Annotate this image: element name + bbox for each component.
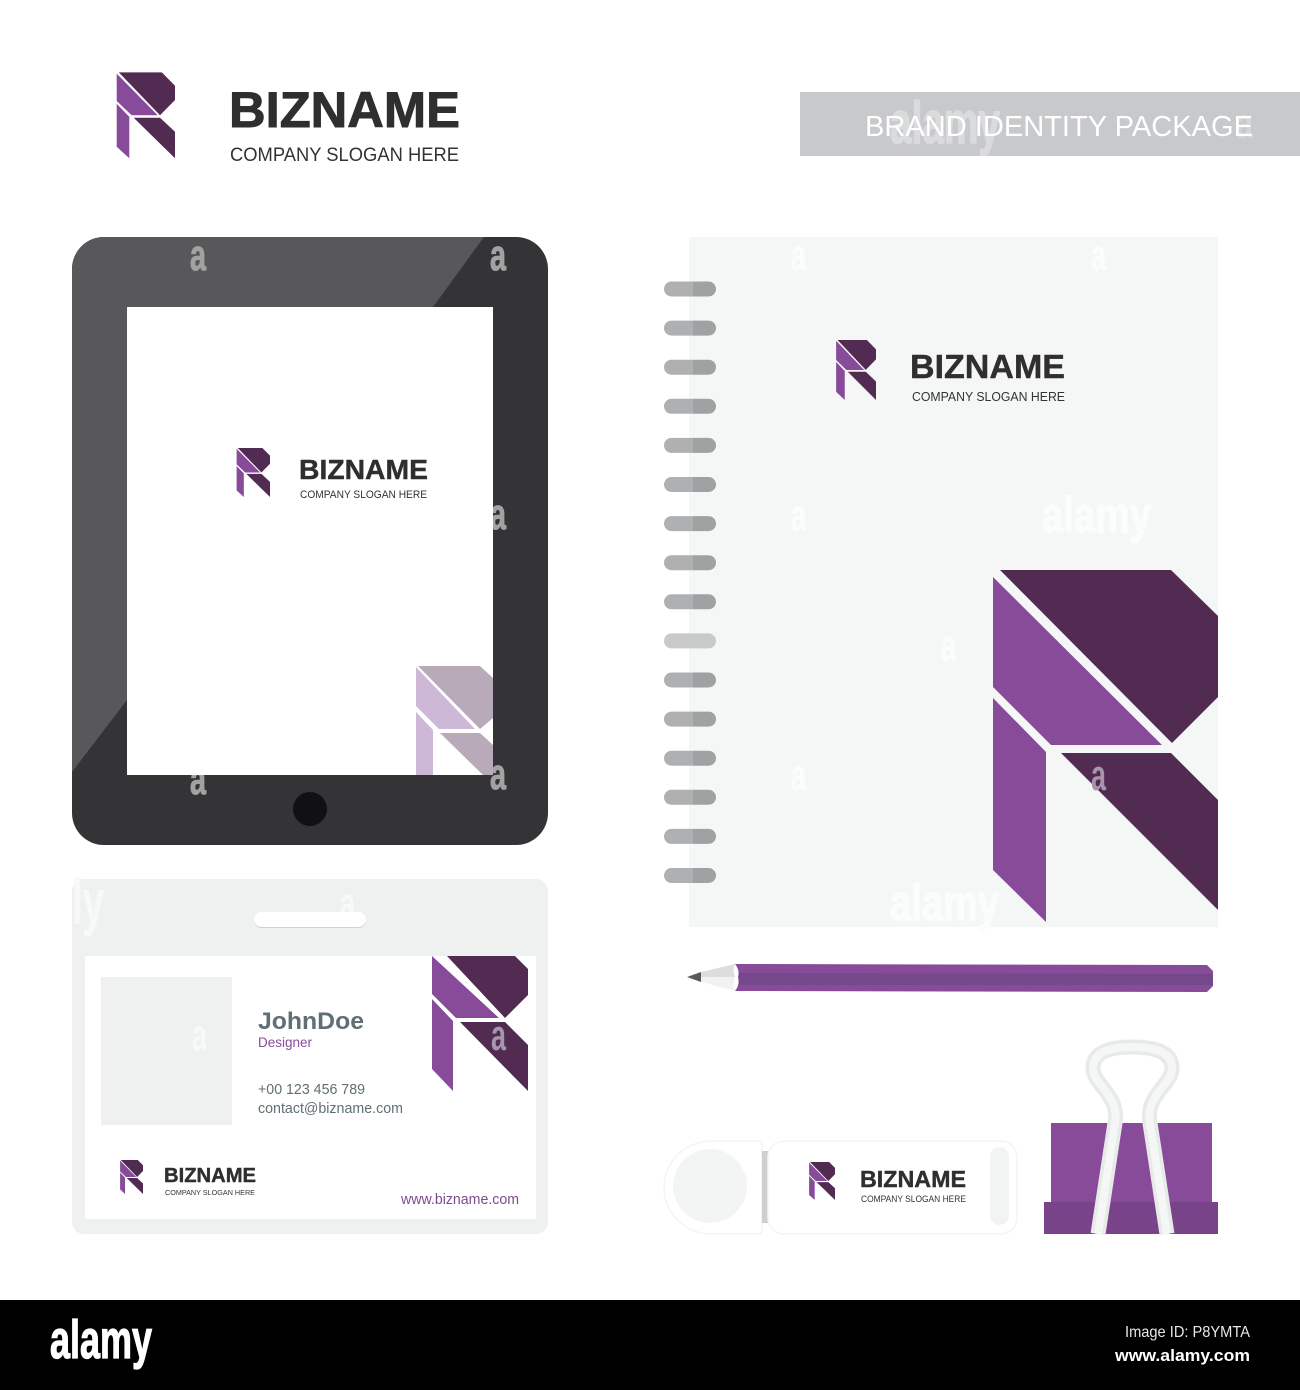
holder: [72, 879, 548, 1234]
spiral rings: [664, 282, 716, 883]
watermark letters on tablet: a: [190, 231, 206, 280]
USB connector: [762, 1151, 768, 1223]
USB cap: [664, 1141, 762, 1234]
phone: +00 123 456 789: [258, 1082, 365, 1098]
banner: brand identity package: [800, 90, 1300, 156]
watermark letters on tablet: a: [490, 231, 506, 280]
watermark letters on tablet: a: [190, 755, 206, 804]
lanyard slot: [254, 912, 366, 928]
USB logo lockup: [809, 1162, 966, 1204]
large R logo on notebook: [993, 570, 1218, 922]
watermark letters on tablet: a: [490, 490, 506, 539]
holder watermarks: ly: [72, 868, 104, 937]
USB logo lockup: COMPANY SLOGAN HERE: [861, 1194, 966, 1204]
card logo lockup: [120, 1160, 256, 1197]
card face: [85, 956, 536, 1219]
notebook watermarks: a: [1091, 231, 1106, 280]
watermark on notebook R: a: [1091, 751, 1106, 800]
icon: R logo: [117, 72, 175, 158]
banner: brand identity package: alamy: [890, 90, 1000, 156]
tablet logo lockup: BIZNAME: [299, 454, 428, 485]
tablet glare: [72, 237, 484, 772]
panel: spiral notebook: [664, 231, 1218, 931]
watermarks on card: [192, 1011, 506, 1060]
home button: [293, 792, 327, 826]
icon: pencil: [687, 964, 1213, 992]
faded R watermark logo: [416, 666, 493, 775]
panel: tablet: [72, 231, 548, 845]
watermarks on card: a: [491, 1011, 506, 1060]
notebook logo lockup: [836, 340, 1065, 404]
website: www.alamy.com: [1114, 1346, 1250, 1365]
company name: BIZNAME: [229, 82, 460, 138]
photo placeholder: [101, 977, 232, 1125]
job title: Designer: [258, 1034, 312, 1050]
notebook logo lockup: COMPANY SLOGAN HERE: [912, 389, 1065, 404]
banner: brand identity package: a: [1236, 99, 1253, 148]
tablet logo lockup: [237, 448, 428, 501]
company slogan: COMPANY SLOGAN HERE: [230, 145, 459, 166]
card logo lockup: COMPANY SLOGAN HERE: [165, 1188, 255, 1197]
panel: ID card holder: [72, 868, 548, 1234]
holder watermarks: a: [340, 879, 355, 928]
watermark letters on tablet: [190, 231, 506, 804]
USB logo lockup: BIZNAME: [860, 1166, 966, 1192]
USB body: [768, 1141, 1017, 1234]
holder watermarks: [72, 868, 355, 937]
notebook watermarks: alamy: [1042, 487, 1151, 543]
icon: binder clip: [1044, 1047, 1218, 1234]
watermark letters on tablet: a: [490, 750, 506, 799]
website: www.bizname.com: [400, 1192, 519, 1208]
card logo lockup: BIZNAME: [164, 1165, 256, 1187]
alamy logo: alamy: [50, 1310, 152, 1370]
tablet logo lockup: COMPANY SLOGAN HERE: [300, 489, 427, 501]
icon: USB drive: [664, 1141, 1017, 1234]
notebook watermarks: [791, 231, 1151, 931]
watermarks on card: a: [192, 1011, 207, 1060]
tablet body: [72, 237, 548, 845]
notebook watermarks: a: [941, 621, 956, 670]
image id: Image ID: P8YMTA: [1125, 1324, 1250, 1341]
tablet screen: [127, 307, 493, 775]
notebook watermarks: a: [791, 751, 806, 800]
notebook page: [689, 237, 1218, 927]
header logo lockup: [117, 72, 460, 166]
notebook watermarks: alamy: [890, 875, 999, 931]
banner: brand identity package: BRAND IDENTITY PACKAGE: [865, 111, 1253, 143]
large R logo on card: [432, 956, 528, 1091]
notebook watermarks: a: [791, 491, 806, 540]
notebook watermarks: a: [791, 231, 806, 280]
notebook logo lockup: BIZNAME: [910, 349, 1065, 386]
footer bar: [0, 1300, 1300, 1390]
name: JohnDoe: [258, 1008, 364, 1035]
email: contact@bizname.com: [258, 1101, 403, 1117]
